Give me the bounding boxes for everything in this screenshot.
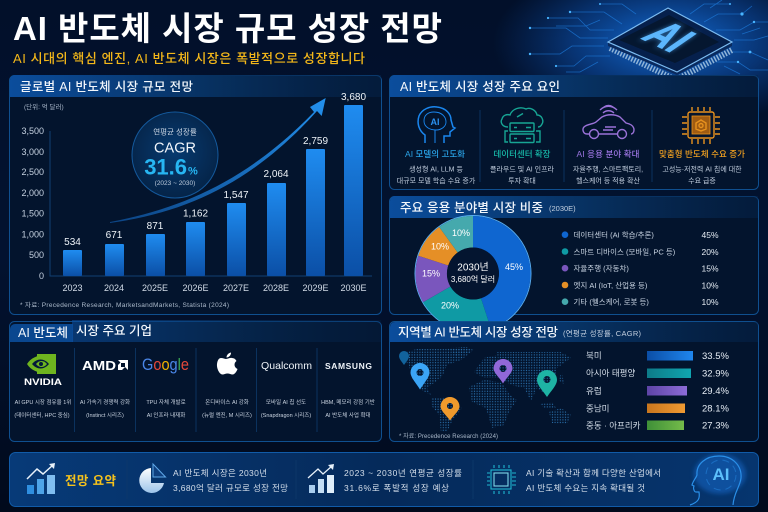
- factor: applications: 자율주행, 스마트팩토리,: [573, 164, 643, 174]
- panel header: AI 반도체 시장 성장 주요 요인: [400, 80, 560, 94]
- year labels: 2028E: [263, 283, 289, 293]
- dotted world map: [399, 347, 571, 432]
- year labels: 2029E: [302, 283, 329, 293]
- company: AMD: (Instinct 시리즈): [86, 411, 124, 419]
- year labels: 2024: [104, 283, 124, 293]
- year labels: 2026E: [182, 283, 209, 293]
- CAGR callout: CAGR: [154, 140, 196, 156]
- company: Google: AI 인프라 내재화: [147, 411, 185, 419]
- hero: AI chip illustration: AI: [632, 15, 706, 59]
- source note: * 자료: Precedence Research, MarketsandMarkets, Statista (2024): [20, 300, 229, 309]
- logo: NVIDIA: NVIDIA: [24, 377, 62, 388]
- company: Samsung: HBM, 메모리 강점 기반: [321, 398, 375, 406]
- legend: 15%: [701, 264, 719, 274]
- value labels: 1,162: [183, 208, 208, 220]
- company: NVIDIA: [14, 354, 71, 419]
- y axis labels: 3,000: [21, 147, 44, 157]
- pin: Europe: [494, 359, 512, 384]
- icon: AI head: AI: [712, 465, 730, 484]
- bar chart: [21, 92, 372, 293]
- company: AMD: AI 가속기 경쟁력 강화: [80, 398, 130, 406]
- donut chart: 15%: [422, 268, 440, 278]
- value labels: 671: [106, 230, 123, 241]
- panel header: (2030E): [549, 204, 576, 213]
- y axis labels: 2,500: [21, 167, 44, 177]
- panel: growth factors: [390, 75, 758, 190]
- unit note: (단위: 억 달러): [24, 102, 64, 111]
- regional bars: 유럽: [586, 386, 602, 396]
- company: Google: [142, 355, 189, 419]
- y axis labels: 3,500: [21, 126, 44, 136]
- factor: custom silicon: [659, 107, 745, 185]
- icon: AI head: [690, 454, 746, 505]
- summary item: demand: AI 반도체 수요는 지속 확대될 것: [526, 483, 645, 493]
- panel: outlook summary: [10, 452, 758, 506]
- value labels: 871: [147, 221, 164, 232]
- panel header: AI 반도체: [18, 326, 68, 340]
- pin: North America: [410, 363, 430, 390]
- summary item: CAGR: [308, 464, 462, 493]
- company: NVIDIA: (데이터센터, HPC 중심): [14, 411, 70, 419]
- factor: custom silicon: 맞춤형 반도체 수요 증가: [659, 149, 745, 159]
- icon: teal chip: [487, 465, 516, 494]
- factor: data center: [490, 108, 555, 185]
- map pins: [399, 351, 557, 420]
- value labels: [64, 92, 366, 248]
- icon: connected car: [583, 106, 634, 138]
- subtitle: AI 시대의 핵심 엔진, AI 반도체 시장은 폭발적으로 성장합니다: [13, 51, 365, 66]
- regional bars: 아시아 태평양: [586, 368, 635, 378]
- icon: AI head: AI: [430, 117, 440, 127]
- legend: 45%: [701, 230, 719, 240]
- panel header: [390, 196, 758, 218]
- icon: growth chart: [308, 464, 334, 493]
- company: Apple: [202, 352, 252, 419]
- regional bars: 북미: [586, 350, 602, 360]
- donut chart: 3,680억 달러: [451, 274, 495, 284]
- heading: outlook summary: 전망 요약: [65, 474, 116, 488]
- legend: 10%: [701, 280, 719, 290]
- company: Apple: (뉴럴 엔진, M 시리즈): [202, 411, 252, 419]
- summary item: demand: [487, 465, 661, 494]
- factor: data center: 데이터센터 확장: [494, 149, 551, 159]
- legend: 엣지 AI (IoT, 산업용 등): [574, 280, 648, 290]
- panel: regional growth: [390, 322, 758, 442]
- pin: Latin America: [440, 397, 460, 420]
- regional bars: 32.9%: [702, 368, 729, 380]
- hero: AI chip illustration: [493, 0, 768, 127]
- donut chart: 10%: [431, 242, 449, 252]
- factor: custom silicon: 수요 급증: [688, 177, 716, 185]
- panel: global market size: [10, 75, 382, 314]
- summary item: market size: 3,680억 달러 규모로 성장 전망: [173, 483, 288, 493]
- donut chart: 2030년: [457, 262, 489, 274]
- panel: application share: [390, 196, 758, 332]
- value labels: 2,759: [303, 136, 328, 147]
- value labels: 2,064: [263, 169, 289, 180]
- summary item: market size: AI 반도체 시장은 2030년: [173, 468, 267, 478]
- company: Qualcomm: 모바일 AI 칩 선도: [266, 398, 306, 406]
- regional bars: [586, 350, 729, 432]
- logo: Samsung: SAMSUNG: [325, 361, 372, 371]
- legend: 자율주행 (자동차): [574, 263, 629, 273]
- regional bars: 29.4%: [702, 386, 729, 397]
- growth arrow: [110, 98, 326, 223]
- factor: AI model: AI 모델의 고도화: [405, 149, 465, 159]
- y axis labels: 1,000: [21, 230, 44, 240]
- factor: data center: 플라우드 및 AI 인프라: [490, 164, 555, 174]
- circuit traces: [530, 0, 768, 74]
- company: Qualcomm: (Snapdragon 시리즈): [261, 411, 311, 419]
- bars: [63, 105, 363, 276]
- panel header: 글로벌 AI 반도체 시장 규모 전망: [20, 80, 193, 94]
- pin: small north: [399, 351, 409, 365]
- year labels: 2023: [62, 283, 83, 293]
- logo: Apple: [217, 352, 238, 374]
- legend: 기타 (헬스케어, 로봇 등): [574, 296, 649, 306]
- chip body: [608, 8, 732, 75]
- regional bars: 중남미: [586, 404, 609, 414]
- panel header: (연평균 성장률, CAGR): [563, 328, 642, 338]
- donut chart: 20%: [441, 300, 459, 310]
- factor: AI model: 생성형 AI, LLM 등: [409, 164, 463, 174]
- factor: applications: 헬스케어 등 적용 확산: [576, 176, 640, 185]
- y axis labels: 0: [39, 271, 44, 281]
- hero: AI chip illustration: AI: [632, 15, 706, 59]
- panel header: [10, 320, 381, 342]
- source note: * 자료: Precedence Research (2024): [399, 432, 498, 440]
- panel header: 주요 응용 분야별 시장 비중: [400, 201, 543, 215]
- y axis labels: 1,500: [21, 208, 44, 218]
- y axis labels: 2,000: [21, 188, 44, 198]
- icon: growth chart: [27, 463, 55, 494]
- company: Google: TPU 자체 개발로: [146, 398, 186, 406]
- CAGR callout: [132, 112, 218, 198]
- summary item: CAGR: 31.6%로 폭발적 성장 예상: [344, 483, 449, 493]
- icon: cloud server: [501, 108, 543, 142]
- panel header: [390, 75, 758, 97]
- logo: Google: Google: [142, 355, 189, 374]
- legend: [562, 230, 719, 307]
- pin: Asia Pacific: [537, 370, 557, 397]
- panel header: 지역별 AI 반도체 시장 성장 전망: [398, 326, 558, 340]
- factor: applications: AI 응용 분야 확대: [576, 149, 640, 159]
- panel header: [390, 322, 758, 342]
- factor: custom silicon: 고성능·저전력 AI 칩에 대한: [662, 164, 742, 174]
- donut chart: [415, 216, 531, 332]
- factor: data center: 투자 확대: [508, 176, 536, 185]
- year labels: 2030E: [340, 283, 367, 293]
- y axis labels: 500: [29, 250, 44, 260]
- company: AMD: [80, 358, 130, 419]
- regional bars: 27.3%: [702, 420, 729, 432]
- panel: key companies: [10, 320, 382, 442]
- panel header: [10, 75, 381, 97]
- year labels: [62, 283, 367, 293]
- legend: 10%: [701, 297, 719, 307]
- icon: pie: [139, 464, 166, 493]
- value labels: 1,547: [223, 190, 249, 201]
- legend: 스마트 디바이스 (모바일, PC 등): [574, 246, 676, 256]
- factor: applications: [573, 106, 643, 185]
- CAGR callout: (2023 ~ 2030): [155, 180, 195, 187]
- regional bars: 33.5%: [702, 351, 729, 362]
- company: Qualcomm: [261, 360, 312, 419]
- company: Apple: 온디바이스 AI 강화: [205, 398, 249, 406]
- icon: orange chip: [682, 107, 720, 144]
- year labels: 2025E: [142, 283, 168, 293]
- company: Samsung: [321, 361, 375, 419]
- summary item: CAGR: 2023 ~ 2030년 연평균 성장률: [344, 468, 462, 478]
- donut chart: 10%: [452, 228, 470, 238]
- factor: AI model: 대규모 모델 학습 수요 증가: [397, 176, 476, 185]
- CAGR callout: 연평균 성장률: [153, 126, 197, 136]
- chip pins: [610, 48, 732, 80]
- title: AI 반도체 시장 규모 성장 전망: [13, 10, 442, 47]
- factor: AI model: [397, 107, 476, 185]
- summary item: market size: [139, 464, 288, 493]
- company: Samsung: AI 반도체 사업 확대: [325, 411, 371, 419]
- panel header: 시장 주요 기업: [76, 324, 152, 338]
- legend: 20%: [701, 247, 719, 257]
- year labels: 2027E: [223, 283, 249, 293]
- regional bars: 28.1%: [702, 404, 729, 414]
- logo: AMD: AMD: [82, 358, 116, 373]
- regional bars: 중동 · 아프리카: [586, 420, 641, 430]
- legend: 데이터센터 (AI 학습/추론): [574, 230, 654, 240]
- value labels: 3,680: [341, 92, 366, 103]
- value labels: 534: [64, 237, 81, 248]
- CAGR callout: 31.6%: [144, 154, 198, 180]
- y axis labels: [21, 126, 44, 281]
- logo: Qualcomm: Qualcomm: [261, 360, 312, 372]
- company: NVIDIA: AI GPU 시장 점유율 1위: [15, 398, 71, 406]
- donut chart: 45%: [505, 262, 523, 272]
- summary item: demand: AI 기술 확산과 함께 다양한 산업에서: [526, 468, 661, 478]
